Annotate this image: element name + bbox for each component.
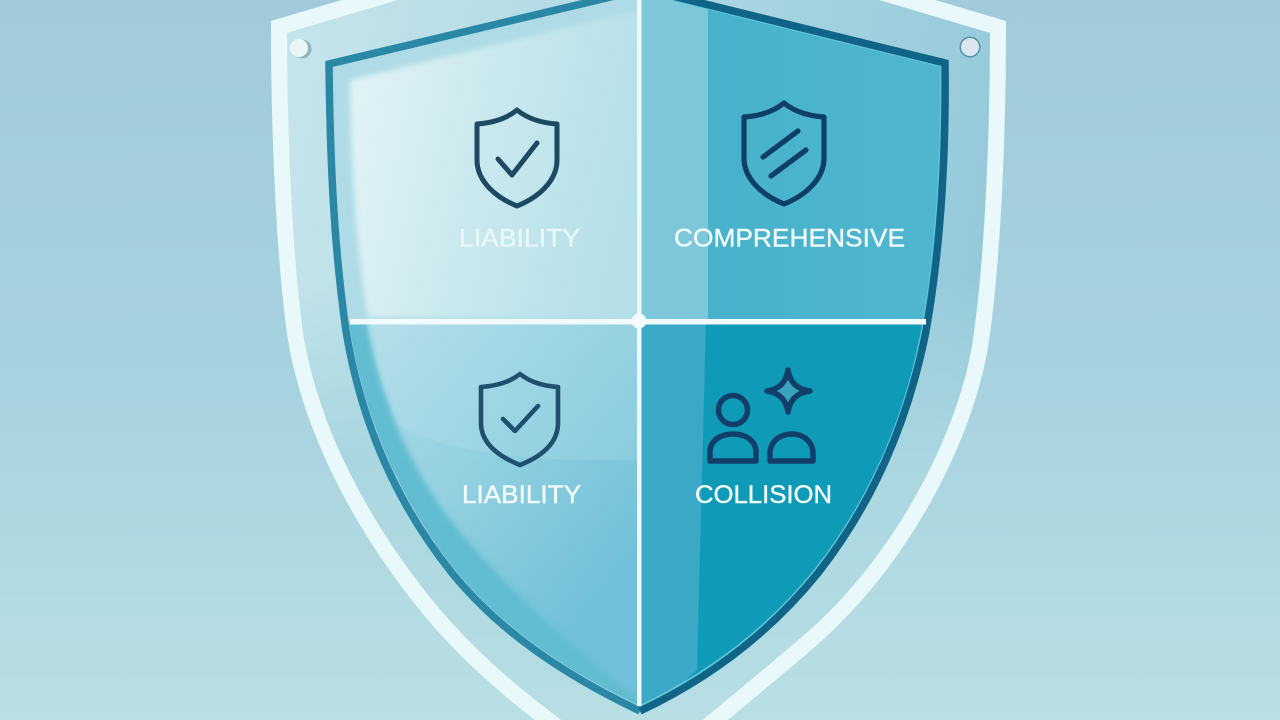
quadrant: top right bbox=[640, 0, 950, 321]
rivet: top left bbox=[290, 39, 312, 58]
quadrant: bottom left bbox=[349, 323, 637, 704]
quadrant: bottom right bbox=[642, 324, 922, 704]
label: collision: COLLISION bbox=[695, 481, 832, 509]
icon: people and sparkle bbox=[710, 370, 813, 461]
icon: shield with check (top left) bbox=[477, 110, 557, 206]
icon: shield with lines (top right) bbox=[744, 103, 824, 204]
label: liability (top): LIABILITY bbox=[459, 224, 580, 252]
dividers bbox=[350, 0, 926, 706]
label: liability (bottom): LIABILITY bbox=[462, 481, 581, 509]
outer shield plate with white rim bbox=[279, 0, 998, 720]
label: comprehensive: COMPREHENSIVE bbox=[674, 224, 905, 252]
inner shield quadrants bbox=[320, 0, 950, 720]
rivet: top right bbox=[960, 36, 980, 58]
quadrant: top left bbox=[333, 12, 637, 321]
shield dark border bbox=[329, 0, 945, 711]
icon: shield with check (bottom left) bbox=[481, 374, 558, 465]
